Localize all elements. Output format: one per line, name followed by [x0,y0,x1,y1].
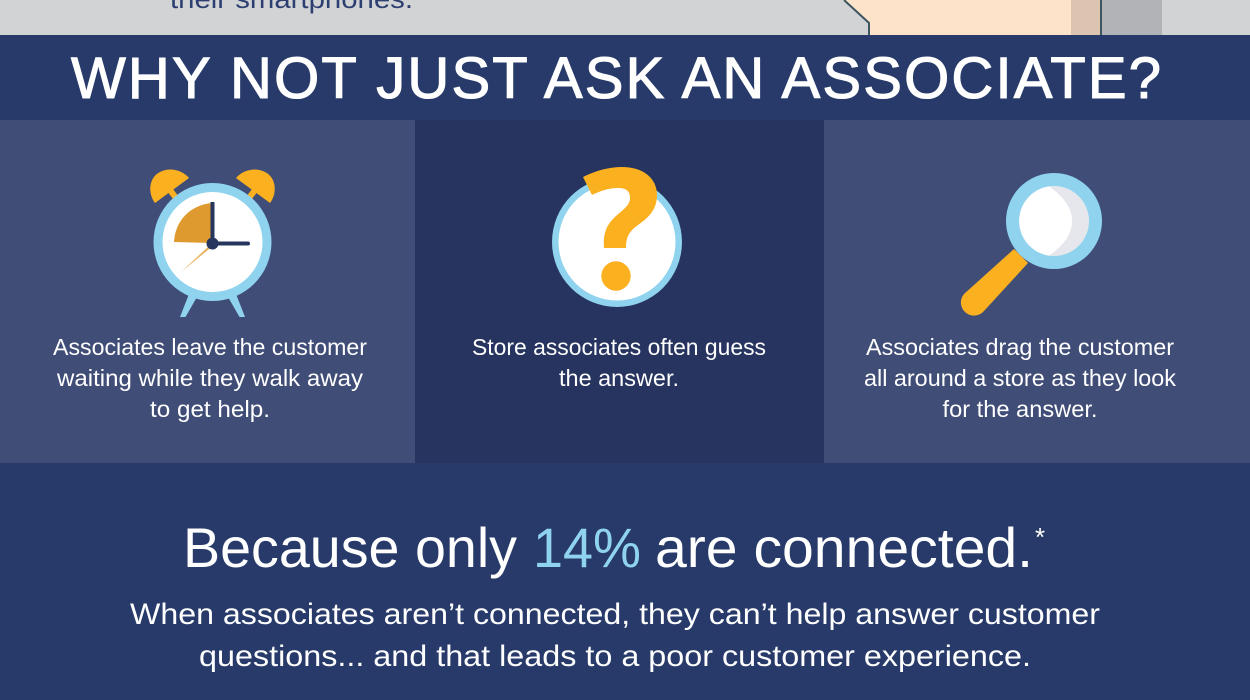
explanation text: questions... and that leads to a poor customer experience. [199,640,1031,673]
panel text: for the answer. [942,396,1098,422]
panel: searching [824,120,1250,463]
panel text: Store associates often guess [472,334,766,360]
panel text: to get help. [150,396,270,422]
panel text: the answer. [559,365,679,391]
illustration: hand and phone [843,0,1162,35]
panel text: Associates leave the customer [53,334,367,360]
icon: question mark [552,167,682,307]
panel text [53,334,367,422]
panel text: waiting while they walk away [56,365,363,391]
headline statistic: Because only [183,516,517,579]
explanation text [130,598,1100,673]
icon: magnifying glass [961,173,1102,316]
conclusion block [0,463,1250,700]
title: WHY NOT JUST ASK AN ASSOCIATE? [71,46,1161,111]
headline statistic: are connected. [655,516,1033,579]
explanation text: When associates aren’t connected, they can’t help answer customer [130,598,1100,631]
header band [0,35,1250,120]
panel text: Associates drag the customer [866,334,1174,360]
panel: guessing [415,120,824,463]
icon: alarm clock [150,170,275,317]
asterisk: * [1035,522,1045,552]
panel text: all around a store as they look [864,365,1176,391]
headline statistic: 14% [533,516,641,579]
top strip [0,0,1250,35]
headline statistic [183,516,1033,579]
panel text [864,334,1176,422]
panel: waiting [0,120,415,463]
panel text [472,334,766,391]
